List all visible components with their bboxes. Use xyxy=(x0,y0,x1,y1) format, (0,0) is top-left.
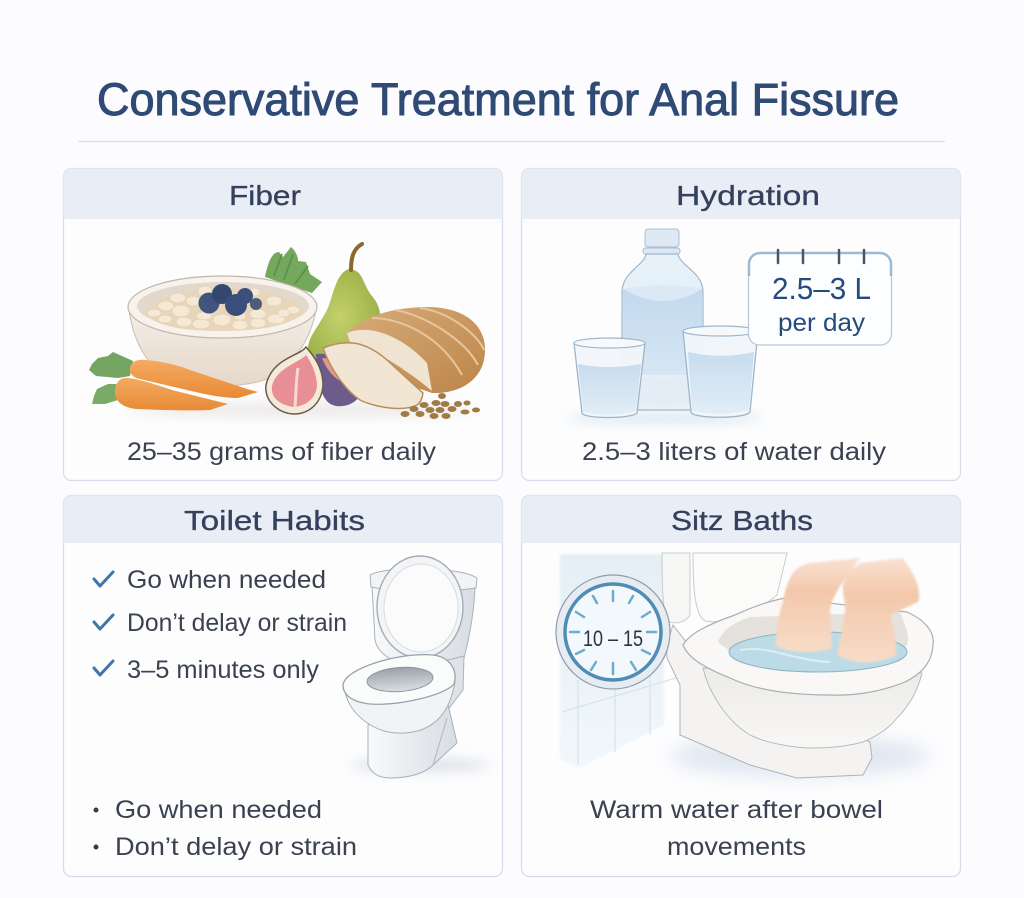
callout: daily amount note: 2.5–3 L xyxy=(772,271,871,306)
bullet list: Don’t delay or strain xyxy=(115,833,357,861)
icon: check 2 xyxy=(94,615,113,629)
icon: legs in water xyxy=(775,558,919,663)
icon: figs xyxy=(266,347,362,414)
heading: hydration xyxy=(522,168,960,219)
checklist: Go when needed xyxy=(127,566,326,594)
icon: leafy greens xyxy=(265,247,322,293)
heading: fiber: Fiber xyxy=(229,180,301,211)
heading: hydration: Hydration xyxy=(676,180,820,211)
wall tiles xyxy=(560,554,676,768)
heading: toilet habits: Toilet Habits xyxy=(184,505,365,536)
icon: bowl xyxy=(667,598,933,778)
heading: sitz baths: Sitz Baths xyxy=(671,505,813,536)
bullet list xyxy=(94,796,357,861)
checklist: Don’t delay or strain xyxy=(127,609,347,637)
icon: timer clock: 10 – 15 xyxy=(583,626,643,651)
icon: carrots xyxy=(89,352,258,410)
callout: daily amount note: per day xyxy=(778,309,866,337)
panel: sitz baths xyxy=(522,496,960,876)
illustration: fiber foods xyxy=(89,244,485,419)
caption: water amount: 2.5–3 liters of water daily xyxy=(582,438,887,466)
icon: water bottle xyxy=(622,229,703,410)
panel: hydration xyxy=(522,168,960,480)
checklist: 3–5 minutes only xyxy=(127,656,319,684)
icon: toilet tank xyxy=(662,553,787,623)
illustration: water bottle and glasses xyxy=(565,229,892,423)
heading: fiber xyxy=(64,168,502,219)
icon: timer clock xyxy=(556,575,670,689)
icon: seeds xyxy=(400,393,480,419)
callout: daily amount note xyxy=(748,250,892,345)
caption: warm water: Warm water after bowel xyxy=(590,796,883,824)
icon: oatmeal bowl xyxy=(128,276,317,386)
icon: bread loaf xyxy=(323,307,485,419)
icon: check 3 xyxy=(94,661,113,675)
checklist xyxy=(94,566,347,684)
bullet list: Go when needed xyxy=(115,796,322,824)
icon: toilet xyxy=(343,556,490,778)
icon: right glass xyxy=(683,326,758,417)
caption: warm water: movements xyxy=(667,833,806,861)
caption: warm water xyxy=(590,796,883,861)
heading: sitz baths xyxy=(522,496,960,543)
icon: left glass xyxy=(574,338,645,418)
panel: fiber xyxy=(64,168,502,480)
caption: fiber amount: 25–35 grams of fiber daily xyxy=(127,438,437,466)
title: Conservative Treatment for Anal Fissure xyxy=(97,74,899,125)
panel: toilet habits xyxy=(64,496,502,876)
heading: toilet habits xyxy=(64,496,502,543)
icon: check 1 xyxy=(94,572,113,586)
illustration: sitz bath xyxy=(556,553,933,778)
icon: pear xyxy=(308,244,380,367)
icon: blueberries xyxy=(198,284,262,316)
